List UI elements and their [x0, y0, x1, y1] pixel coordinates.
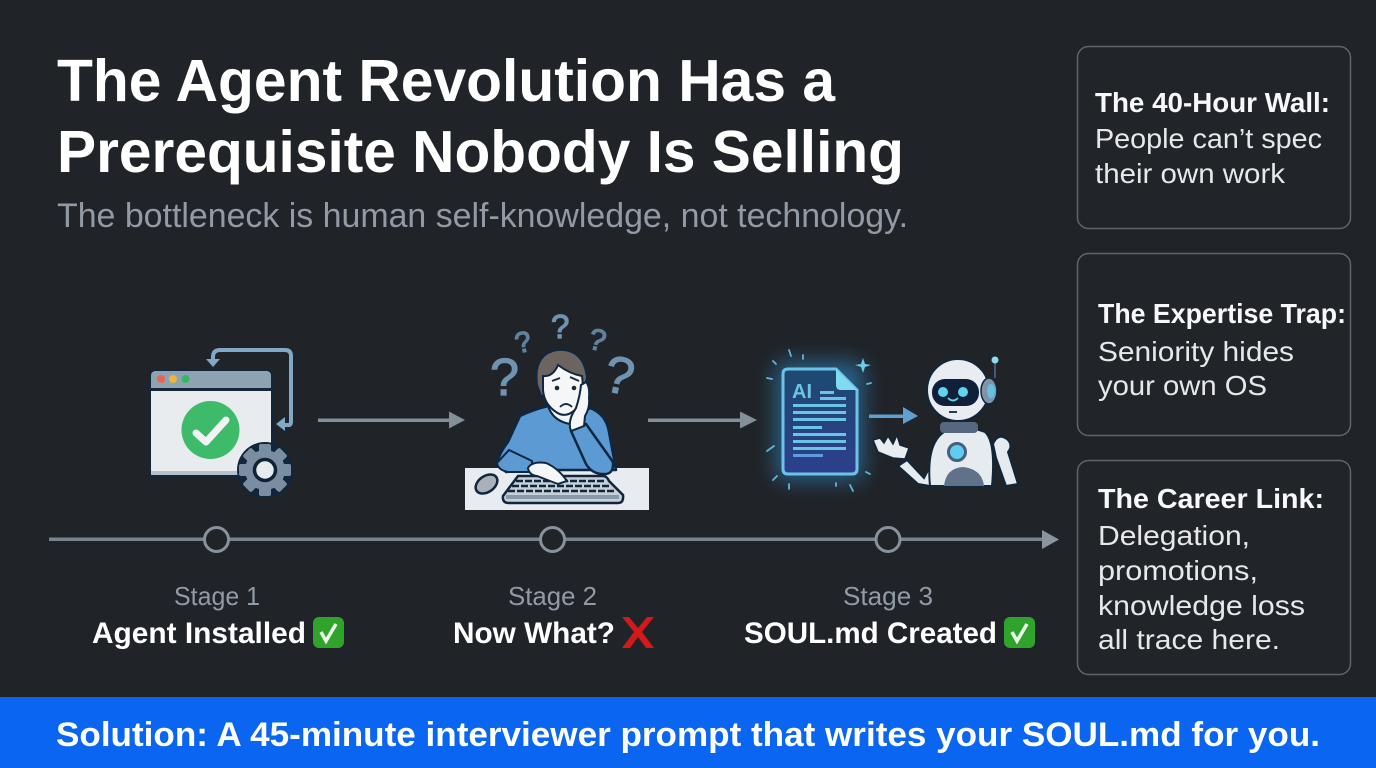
- icon: green check emoji: [313, 617, 344, 648]
- solution banner: [0, 697, 1376, 768]
- panel: the career link: promotions,: [1098, 555, 1258, 586]
- panel: the expertise trap: [1078, 254, 1350, 436]
- hand on cheek: [570, 382, 589, 431]
- green check badge: [182, 401, 240, 459]
- panel: the 40-hour wall: People can’t spec: [1095, 123, 1322, 154]
- icon: installed app window with gear: [149, 350, 293, 498]
- icon: red cross emoji: [622, 617, 654, 648]
- timeline node 3: [876, 528, 900, 552]
- head: [927, 359, 989, 421]
- keyboard: [503, 476, 623, 503]
- question marks: [490, 308, 639, 408]
- stage 2 label: Stage 2: [508, 581, 597, 611]
- question marks: ?: [599, 345, 639, 408]
- stage 3 label: SOUL.md Created: [744, 617, 997, 650]
- icon: robot: [873, 356, 1018, 486]
- hand: [873, 435, 909, 459]
- title: [57, 48, 904, 185]
- title: The Agent Revolution Has a: [57, 48, 836, 114]
- typing hand: [528, 463, 567, 484]
- question marks: ?: [490, 349, 519, 407]
- ear: [981, 378, 997, 404]
- hair and head: [536, 350, 587, 396]
- stage 2 label: Now What?: [453, 617, 615, 650]
- neck: [548, 398, 575, 424]
- panel: the 40-hour wall: The 40-Hour Wall:: [1095, 87, 1330, 118]
- arrow: document to robot: [869, 407, 918, 424]
- desk: [465, 468, 649, 510]
- left upper arm: [898, 458, 942, 486]
- panel: the expertise trap: your own OS: [1098, 370, 1267, 401]
- stage 1 label: [92, 581, 344, 650]
- window: [149, 369, 273, 478]
- icon: glowing AI document: [767, 350, 871, 491]
- subtitle: The bottleneck is human self-knowledge, not technology.: [57, 197, 908, 235]
- solution banner: Solution: A 45-minute interviewer prompt that writes your SOUL.md for you.: [56, 716, 1320, 754]
- icon: confused person at keyboard: [465, 308, 649, 510]
- panel: the career link: The Career Link:: [1098, 483, 1324, 514]
- stage 3 label: [744, 581, 1035, 650]
- icon: green check emoji: [1004, 617, 1035, 648]
- title: Prerequisite Nobody Is Selling: [57, 119, 904, 185]
- panel: the 40-hour wall: their own work: [1095, 158, 1286, 189]
- mouse: [472, 471, 501, 497]
- arrow: stage 2 to stage 3: [648, 412, 757, 428]
- body: [497, 406, 616, 472]
- panel: the 40-hour wall: [1078, 46, 1350, 228]
- icon: glowing AI document: AI: [792, 381, 812, 403]
- body: [929, 428, 993, 486]
- panel: the career link: [1078, 460, 1350, 674]
- icon: loop arrow: [206, 350, 291, 431]
- panel: the career link: all trace here.: [1098, 624, 1280, 655]
- stage 1 label: Stage 1: [174, 581, 260, 611]
- stage 3 label: Stage 3: [843, 581, 933, 611]
- stage 2 label: [453, 581, 654, 650]
- right arm: [993, 437, 1018, 486]
- question marks: ?: [585, 323, 609, 359]
- question marks: ?: [551, 308, 569, 345]
- timeline node 2: [540, 528, 564, 552]
- panel: the expertise trap: Seniority hides: [1098, 336, 1294, 367]
- timeline: [49, 528, 1059, 552]
- arrow: stage 1 to stage 2: [318, 412, 465, 428]
- timeline node 1: [204, 528, 228, 552]
- question marks: ?: [512, 326, 534, 360]
- panel: the career link: Delegation,: [1098, 520, 1250, 551]
- stage 1 label: Agent Installed: [92, 617, 306, 650]
- antenna: [994, 362, 996, 378]
- panel: the career link: knowledge loss: [1098, 590, 1305, 621]
- panel: the expertise trap: The Expertise Trap:: [1098, 298, 1346, 329]
- forearm: [571, 424, 613, 474]
- gear: [237, 442, 293, 498]
